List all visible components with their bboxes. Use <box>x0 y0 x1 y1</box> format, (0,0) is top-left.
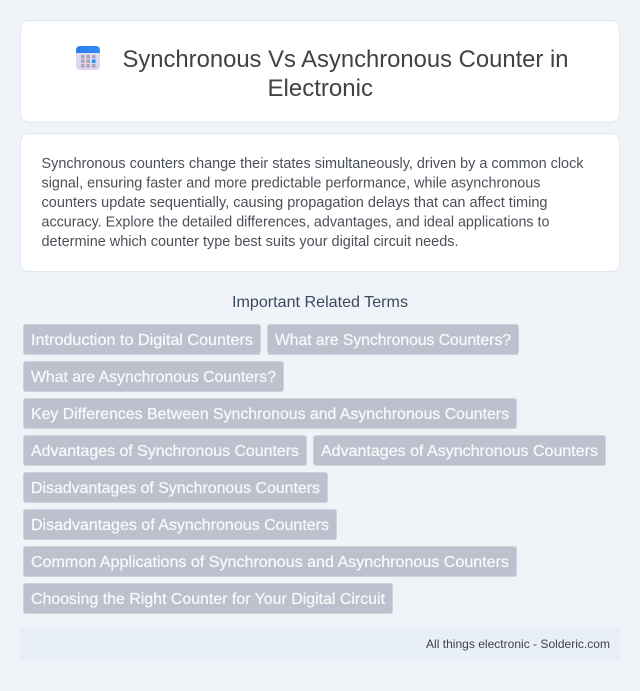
chip: what are asynchronous <box>24 362 284 392</box>
description text: signal, ensuring faster and more predictable performance, while asynchronous <box>42 176 540 192</box>
chip: advantages of synchronous: Advantages of Synchronous Counters <box>31 443 299 460</box>
chip: what are synchronous: What are Synchronous Counters? <box>275 332 511 349</box>
chip: common applications: Common Applications of Synchronous and Asynchronous Counters <box>31 554 509 571</box>
description text: determine which counter type best suits your digital circuit needs. <box>42 234 458 250</box>
description text: accuracy. Explore the detailed differences, advantages, and ideal applications to <box>42 214 550 230</box>
description text: Synchronous counters change their states simultaneously, driven by a common clock <box>42 156 584 172</box>
icon: calendar <box>76 46 100 70</box>
chip: key differences: Key Differences Between Synchronous and Asynchronous Counters <box>31 406 509 423</box>
title: Electronic <box>268 75 373 102</box>
panel: title card <box>20 20 620 122</box>
chip: introduction <box>24 324 260 354</box>
chip: advantages of asynchronous <box>314 436 606 466</box>
chip: common applications <box>24 546 516 576</box>
title: Synchronous Vs Asynchronous Counter in <box>122 46 568 73</box>
chip: choosing the right counter <box>24 584 392 614</box>
chip: disadvantages of synchronous <box>24 472 328 502</box>
panel: description card <box>20 134 620 272</box>
footer credit: All things electronic - Solderic.com <box>426 637 610 651</box>
chip: introduction: Introduction to Digital Counters <box>31 332 253 349</box>
chip: what are synchronous <box>268 324 518 354</box>
footer <box>20 627 620 661</box>
description text: counters update sequentially, causing propagation delays that can affect timing <box>42 195 548 211</box>
chip: disadvantages of synchronous: Disadvantages of Synchronous Counters <box>31 480 320 497</box>
heading: important related terms: Important Related Terms <box>232 294 408 311</box>
chip: advantages of synchronous <box>24 436 306 466</box>
chip: key differences <box>24 398 516 428</box>
chip: advantages of asynchronous: Advantages of Asynchronous Counters <box>321 443 598 460</box>
chip: disadvantages of asynchronous: Disadvantages of Asynchronous Counters <box>31 517 329 534</box>
chip: what are asynchronous: What are Asynchronous Counters? <box>31 369 276 386</box>
chip: disadvantages of asynchronous <box>24 510 336 540</box>
chip: choosing the right counter: Choosing the Right Counter for Your Digital Circuit <box>31 591 386 608</box>
